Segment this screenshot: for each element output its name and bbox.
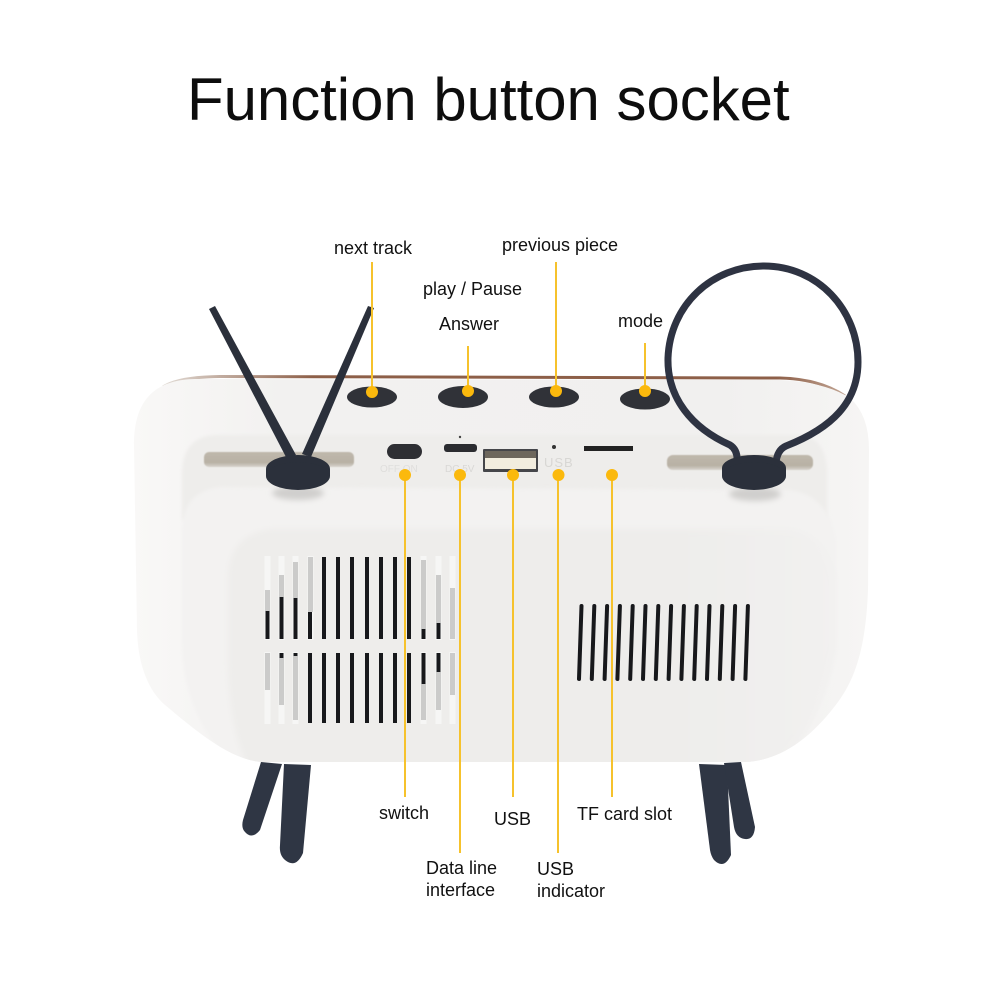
grille light slot backing bbox=[264, 556, 456, 724]
grille dark slots bbox=[266, 557, 440, 723]
right speaker grille bbox=[579, 606, 748, 679]
antenna base bbox=[722, 455, 786, 490]
callout: USB indicator bbox=[552, 469, 564, 853]
recessed port band bbox=[184, 438, 217, 508]
port legends: DC 5V bbox=[445, 464, 475, 475]
antenna slot: right bbox=[667, 455, 813, 470]
label: USB indicator: indicator bbox=[537, 881, 605, 901]
antenna ring bbox=[668, 266, 858, 463]
port legends: OFF ON bbox=[380, 464, 418, 475]
top brown edge bbox=[163, 376, 845, 396]
callout: previous piece bbox=[550, 262, 562, 397]
left speaker grille bbox=[264, 556, 456, 724]
callout: switch bbox=[399, 469, 411, 797]
label: TF card slot: TF card slot bbox=[577, 804, 672, 824]
antenna slot: left bbox=[204, 452, 354, 467]
infographic canvas bbox=[135, 76, 869, 897]
micro USB port bbox=[444, 436, 477, 452]
antenna rods bbox=[209, 306, 374, 459]
callout: mode bbox=[639, 343, 651, 397]
callout: TF card slot bbox=[606, 469, 618, 797]
right loop antenna bbox=[668, 266, 858, 501]
label: play / Pause: play / Pause bbox=[423, 279, 522, 299]
title: Function button socket bbox=[187, 66, 790, 133]
label: USB indicator bbox=[537, 859, 605, 901]
callout: data line interface bbox=[454, 469, 466, 853]
callout: play / pause answer bbox=[462, 346, 474, 397]
label: Data line interface: interface bbox=[426, 880, 495, 900]
port legends bbox=[380, 464, 475, 475]
label: Data line interface: Data line bbox=[426, 858, 497, 878]
USB indicator light and legend: USB bbox=[544, 455, 574, 470]
callout lines and dots bbox=[366, 262, 651, 853]
left V antenna bbox=[209, 306, 374, 500]
callout: next track bbox=[366, 262, 378, 398]
speaker legs bbox=[242, 762, 755, 864]
TF card slot bbox=[584, 446, 633, 451]
power switch bbox=[387, 444, 422, 459]
raised rear panel bbox=[182, 487, 836, 770]
body panels bbox=[182, 435, 836, 770]
callout: USB bbox=[507, 469, 519, 797]
USB port bbox=[483, 449, 538, 472]
label: switch: switch bbox=[379, 803, 429, 823]
label: USB: USB bbox=[494, 809, 531, 829]
USB indicator light and legend bbox=[544, 445, 574, 470]
label: Answer: Answer bbox=[439, 314, 499, 334]
label: USB indicator: USB bbox=[537, 859, 574, 879]
label: mode: mode bbox=[618, 311, 663, 331]
label: Data line interface bbox=[426, 858, 497, 900]
speaker body bbox=[134, 376, 869, 770]
function buttons bbox=[347, 386, 670, 410]
label: previous piece: previous piece bbox=[502, 235, 618, 255]
grille grey interior bbox=[265, 557, 455, 720]
label: next track: next track bbox=[334, 238, 413, 258]
inner rear panel bbox=[228, 529, 836, 770]
antenna base bbox=[266, 455, 330, 490]
